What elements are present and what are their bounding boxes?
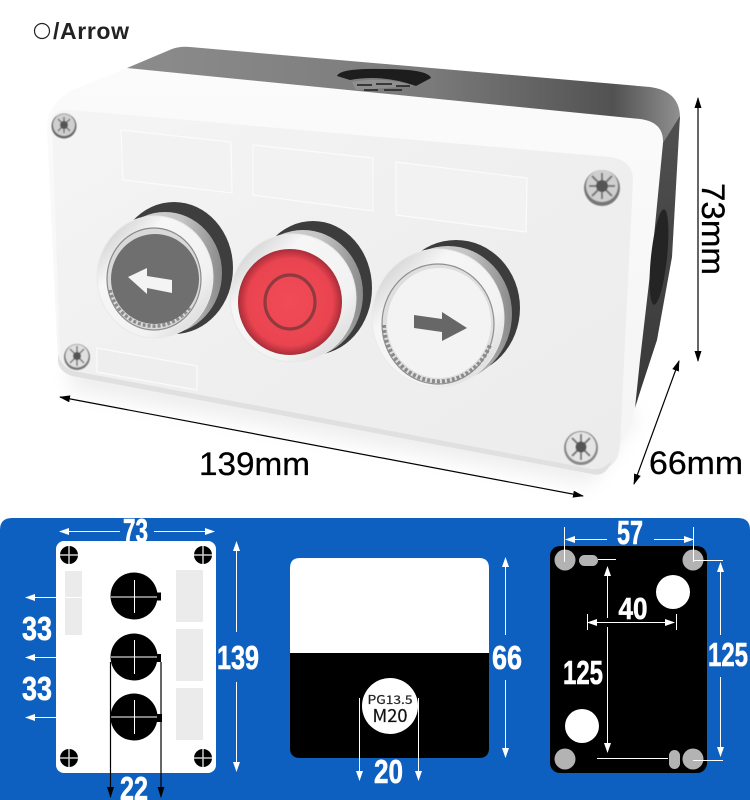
- top cable gland: [337, 69, 431, 90]
- spacing dimensions 33: 33: [22, 670, 52, 707]
- screw bottom right: [564, 431, 598, 465]
- dimension: length 139mm: 139mm: [199, 446, 310, 482]
- knockout holes: [565, 575, 690, 743]
- width dimension 57: 57: [617, 514, 643, 551]
- box white cover: [47, 68, 663, 475]
- height dimension 66: 66: [492, 639, 522, 676]
- dimension: length 139mm: [60, 397, 583, 496]
- screw top left: [52, 114, 76, 138]
- height dimension 139: 139: [217, 639, 259, 676]
- side cable hole: [646, 208, 672, 306]
- spacing dimensions 33: [22, 598, 56, 718]
- spacing dimensions 33: 33: [22, 610, 52, 647]
- black base plate: [550, 546, 707, 773]
- button cutouts: [110, 572, 162, 740]
- panel: front drawing: [22, 512, 259, 800]
- screw bottom left: [64, 344, 90, 370]
- inner dimension 40: 40: [618, 591, 648, 626]
- dimension: depth 66mm: 66mm: [649, 445, 743, 481]
- left arrow button: [97, 202, 233, 338]
- label plates: [97, 130, 527, 390]
- width dimension 57: [566, 514, 693, 551]
- mounting holes: [554, 550, 704, 770]
- inner dimension 40: [588, 591, 674, 626]
- cable entry circle: PG13.5: [368, 691, 413, 708]
- product photo: switch box: [47, 47, 680, 485]
- width dimension 73: 73: [123, 512, 148, 549]
- blue dimensions panel: [0, 518, 750, 800]
- hole dimension 20: 20: [374, 753, 403, 790]
- hole dimension 20: [360, 698, 418, 790]
- red indicator button: [230, 221, 372, 362]
- screw top right: [584, 170, 620, 206]
- cable entry circle: M20: [372, 702, 408, 728]
- black base half: [290, 653, 489, 758]
- box dark rear housing: [127, 47, 680, 440]
- panel: rear drawing: [550, 514, 748, 773]
- right arrow button: [372, 240, 520, 387]
- title: /Arrow: [53, 18, 129, 44]
- panel: side drawing: [290, 558, 522, 790]
- front plate: [56, 541, 216, 773]
- inner dimension 125: 125: [563, 654, 603, 691]
- label areas: [65, 570, 203, 740]
- dimension: height 73mm: 73mm: [695, 183, 731, 275]
- white cover half: [290, 558, 489, 653]
- corner screw holes: [60, 546, 212, 767]
- cable entry circle: [362, 678, 418, 734]
- dimension: depth 66mm: [634, 361, 743, 484]
